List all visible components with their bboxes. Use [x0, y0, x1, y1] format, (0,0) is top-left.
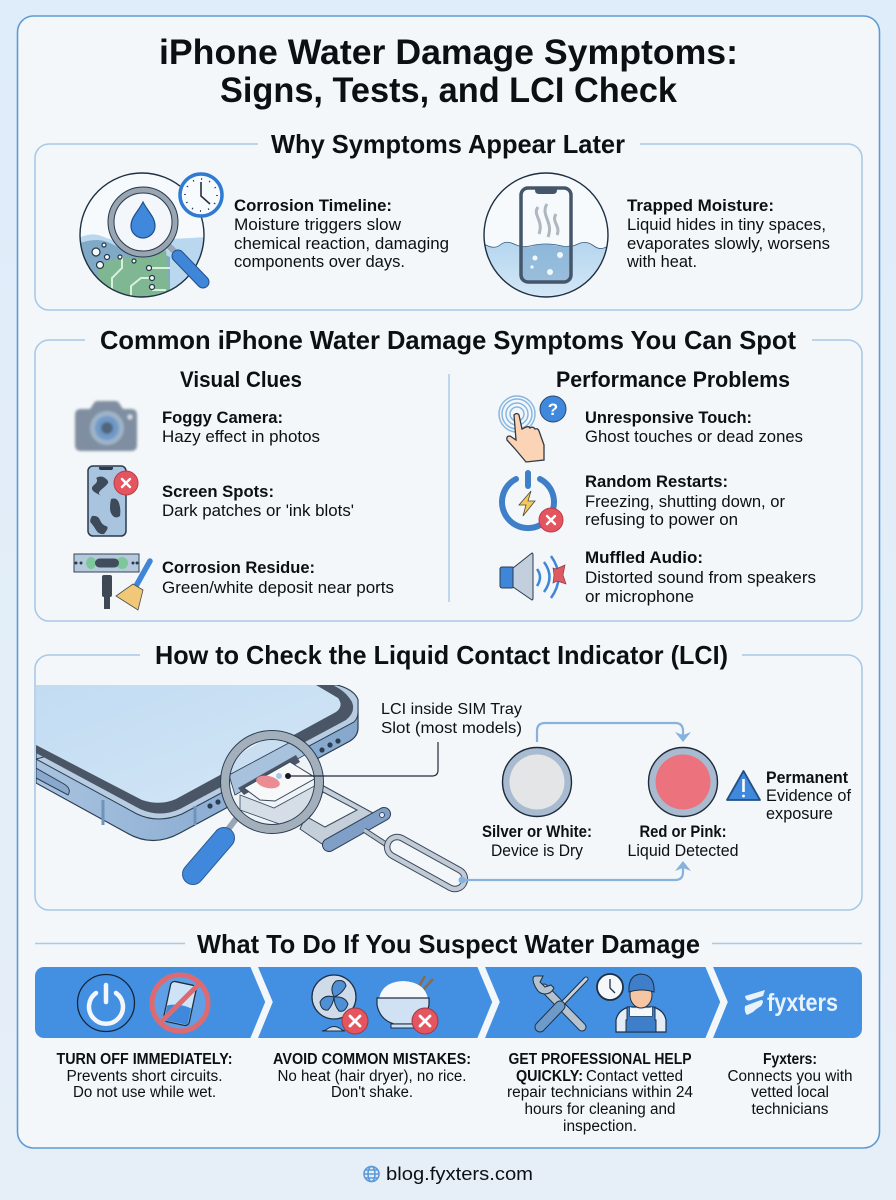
text: muffled audio: Muffled Audio: — [585, 549, 703, 567]
text: corrosion residue — [162, 559, 394, 597]
icon: phone in water — [484, 173, 622, 300]
step text: professional help: GET PROFESSIONAL HELP — [508, 1051, 692, 1068]
step text: fyxters: technicians — [752, 1101, 829, 1118]
step text: professional help: Contact vetted — [586, 1068, 683, 1085]
indicator: silver or white: Silver or White: — [482, 823, 592, 841]
icon: touch with question: ? — [548, 400, 558, 419]
step text: avoid mistakes — [273, 1051, 471, 1101]
indicator: red or pink: Liquid Detected — [628, 842, 738, 860]
text: random restarts: refusing to power on — [585, 511, 738, 529]
title: iPhone Water Damage Symptoms: — [159, 33, 738, 72]
text: corrosion timeline: chemical reaction, damaging — [234, 235, 449, 253]
panel: common symptoms — [35, 325, 862, 621]
panel: why symptoms appear later — [35, 129, 862, 310]
callout line to LCI — [288, 742, 438, 776]
panel: check the LCI — [35, 640, 862, 910]
icon: phone with screen spots — [88, 466, 138, 536]
text: screen spots: Screen Spots: — [162, 483, 274, 501]
step text: fyxters: Connects you with — [728, 1068, 852, 1085]
text: foggy camera: Hazy effect in photos — [162, 428, 320, 446]
text: muffled audio: Distorted sound from speakers — [585, 569, 816, 587]
text: trapped moisture: Liquid hides in tiny spaces, — [627, 216, 826, 234]
magnifier — [193, 725, 324, 874]
icon: fan with X — [312, 975, 368, 1034]
title — [159, 33, 738, 110]
icon: globe — [364, 1166, 379, 1182]
heading: why symptoms appear later: Why Symptoms Appear Later — [271, 129, 625, 159]
indicator: silver or white: Device is Dry — [491, 842, 584, 860]
text: unresponsive touch: Unresponsive Touch: — [585, 409, 752, 427]
label: LCI inside SIM tray: Slot (most models) — [381, 720, 522, 737]
icon: corrosion residue and brush — [74, 554, 150, 610]
indicator: red or pink — [628, 748, 738, 860]
logo: fyxters: fyxters — [767, 989, 838, 1017]
SIM tray and eject pin — [300, 784, 468, 893]
step text: turn off: Do not use while wet. — [73, 1084, 216, 1101]
icon: warning triangle — [727, 771, 760, 800]
step text: turn off: TURN OFF IMMEDIATELY: — [56, 1051, 232, 1068]
text: trapped moisture: evaporates slowly, worsens — [627, 235, 830, 253]
subheading: performance problems: Performance Problems — [556, 367, 790, 392]
text: corrosion residue: Corrosion Residue: — [162, 559, 315, 577]
heading: what to do: What To Do If You Suspect Water Damage — [197, 929, 700, 959]
step text: avoid mistakes: Don't shake. — [331, 1084, 413, 1101]
icon: do not use wet phone — [152, 975, 208, 1031]
label: LCI inside SIM tray — [381, 701, 522, 737]
text: permanent evidence: Permanent — [766, 769, 848, 787]
text: permanent evidence: exposure — [766, 805, 833, 823]
text: unresponsive touch — [585, 409, 803, 446]
label: LCI inside SIM tray: LCI inside SIM Tray — [381, 701, 522, 718]
step text: fyxters: Fyxters: — [763, 1051, 817, 1068]
heading: LCI: How to Check the Liquid Contact Indicator (LCI) — [155, 640, 728, 670]
text: corrosion residue: Green/white deposit near ports — [162, 579, 394, 597]
text: random restarts: Freezing, shutting down, or — [585, 493, 785, 511]
icon: power button — [78, 974, 134, 1032]
text: corrosion timeline — [234, 197, 449, 271]
text: foggy camera: Foggy Camera: — [162, 409, 283, 427]
heading: common symptoms: Common iPhone Water Damage Symptoms You Can Spot — [100, 325, 796, 355]
text: trapped moisture: with heat. — [626, 253, 697, 271]
step text: fyxters — [728, 1051, 852, 1118]
text: foggy camera — [162, 409, 320, 446]
arrow: silver to red — [537, 723, 691, 742]
icon: rice bowl with X — [377, 976, 438, 1034]
step text: professional help: repair technicians within 24 — [507, 1084, 693, 1101]
step text: fyxters: vetted local — [751, 1084, 829, 1101]
icon: foggy camera — [75, 401, 137, 451]
indicator: silver or white — [482, 748, 592, 860]
illustration: iPhone corner with SIM tray — [36, 685, 468, 893]
step text: professional help: hours for cleaning and — [524, 1101, 676, 1118]
text: muffled audio: or microphone — [585, 588, 694, 606]
icon: power with bolt — [502, 470, 563, 532]
icon: touch with question — [499, 396, 566, 462]
text: permanent evidence — [766, 769, 851, 823]
step text: professional help — [507, 1051, 693, 1135]
icon: wrench and screwdriver — [533, 976, 586, 1027]
text: unresponsive touch: Ghost touches or dead zones — [585, 428, 803, 446]
text: trapped moisture: Trapped Moisture: — [627, 197, 774, 215]
step text: professional help: inspection. — [563, 1118, 637, 1135]
step text: avoid mistakes: No heat (hair dryer), no rice. — [278, 1068, 466, 1085]
text: corrosion timeline: components over days. — [234, 253, 405, 271]
icon: corrosion magnifier and clock — [78, 173, 222, 300]
text: random restarts — [585, 473, 785, 529]
step text: professional help: QUICKLY: — [516, 1068, 583, 1085]
text: screen spots: Dark patches or 'ink blots' — [162, 502, 354, 520]
text: permanent evidence: Evidence of — [766, 787, 851, 805]
text: corrosion timeline: Moisture triggers slow — [234, 216, 401, 234]
text: corrosion timeline: Corrosion Timeline: — [234, 197, 392, 215]
step text: turn off: Prevents short circuits. — [66, 1068, 222, 1085]
icon: clock — [597, 974, 623, 1000]
section: what to do — [35, 929, 862, 1135]
text: muffled audio — [585, 549, 816, 606]
arrow: pin to red — [458, 861, 691, 884]
title: Signs, Tests, and LCI Check — [220, 71, 678, 110]
icon: muffled speaker — [500, 553, 566, 600]
footer: website: blog.fyxters.com — [386, 1164, 533, 1184]
text: screen spots — [162, 483, 354, 520]
indicator: red or pink: Red or Pink: — [640, 823, 726, 841]
text: random restarts: Random Restarts: — [585, 473, 728, 491]
text: trapped moisture — [626, 197, 830, 271]
logo: fyxters — [745, 989, 838, 1017]
step text: turn off — [56, 1051, 232, 1101]
subheading: visual clues: Visual Clues — [180, 367, 302, 392]
icon: technician — [616, 974, 666, 1032]
step text: avoid mistakes: AVOID COMMON MISTAKES: — [273, 1051, 471, 1068]
step band — [35, 964, 862, 1041]
